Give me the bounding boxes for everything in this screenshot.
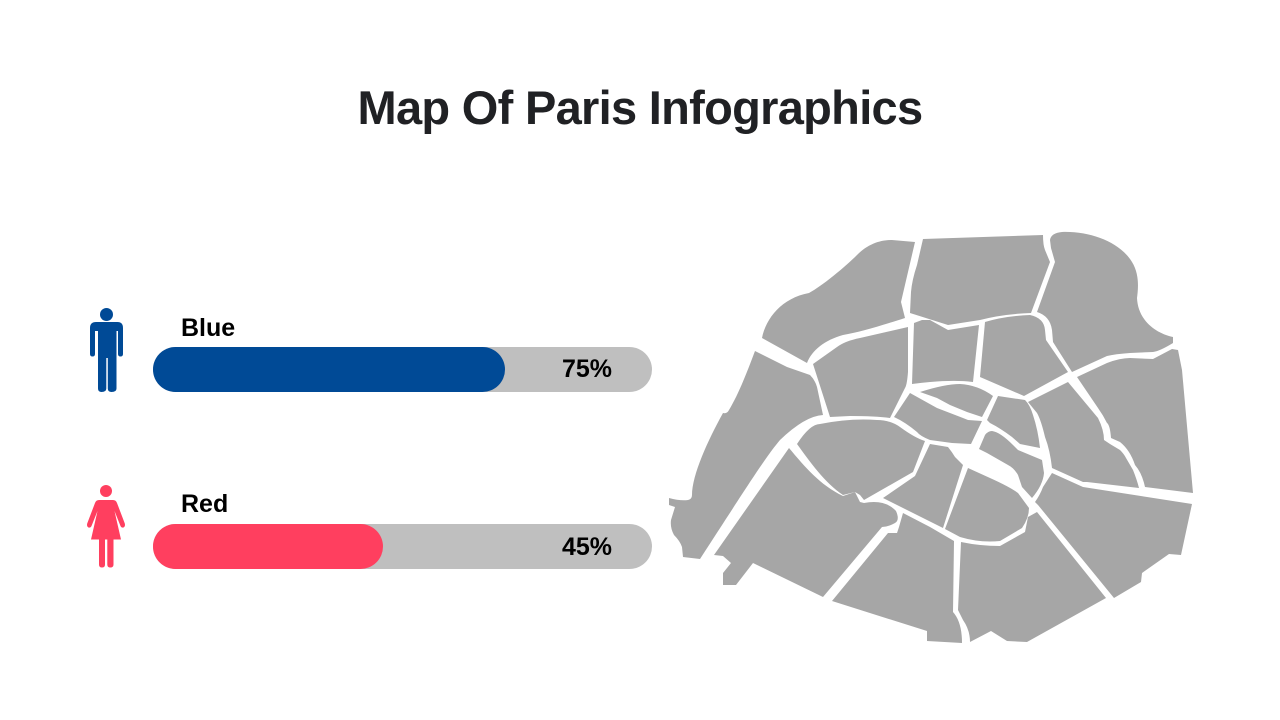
- district: north inner left: [912, 320, 979, 384]
- district: centre north-east: [987, 396, 1040, 448]
- district: centre north: [920, 384, 993, 417]
- district: south-west: [714, 448, 898, 597]
- district: south-west inner: [883, 444, 963, 528]
- district: north: [910, 235, 1050, 325]
- icon: blue man: [90, 308, 123, 392]
- district: south-central: [832, 513, 962, 643]
- district: east: [1077, 349, 1193, 493]
- value: 45%: 45%: [562, 533, 612, 561]
- bar track: Blue: [153, 347, 652, 392]
- title: Map Of Paris Infographics: [358, 81, 922, 134]
- district: south-east: [1035, 473, 1192, 598]
- district: north-west inner: [813, 327, 908, 418]
- bar track: Red: [153, 524, 652, 569]
- bar fill: Red 45%: [153, 524, 383, 569]
- district: north inner right: [980, 315, 1068, 396]
- label: Red: Red: [181, 490, 228, 518]
- label: Blue: Blue: [181, 314, 235, 342]
- district: centre west: [894, 393, 982, 444]
- district: south inner: [945, 468, 1029, 542]
- district: north-west: [762, 240, 915, 363]
- district: west: [669, 351, 823, 559]
- icon: red woman: [87, 485, 125, 568]
- district: inner east: [1028, 382, 1139, 488]
- district: centre east: [979, 431, 1044, 498]
- district: north-east: [1037, 232, 1173, 372]
- value: 75%: 75%: [562, 355, 612, 383]
- district: south: [958, 512, 1106, 642]
- bar fill: Blue 75%: [153, 347, 505, 392]
- district: west inner: [797, 420, 925, 500]
